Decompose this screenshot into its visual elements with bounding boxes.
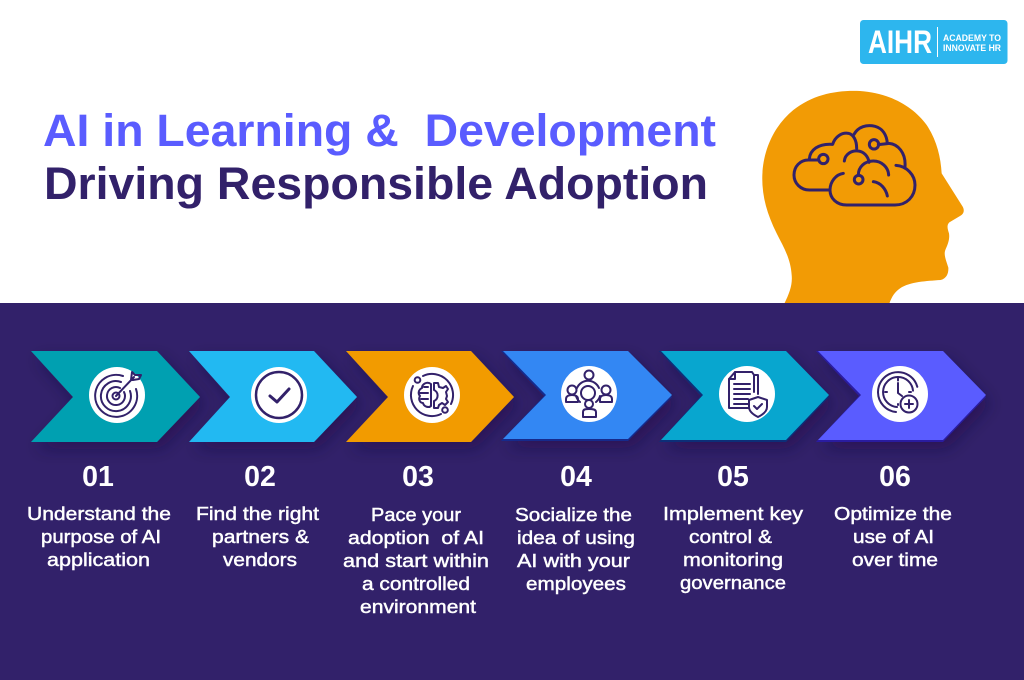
step 04: idea of using bbox=[517, 527, 635, 548]
step 01: purpose of AI bbox=[41, 526, 161, 547]
chevron 5 bbox=[659, 351, 829, 442]
step 01: Understand the bbox=[27, 503, 171, 524]
logo: AIHR: INNOVATE HR bbox=[943, 43, 1001, 54]
chevron 6 bbox=[816, 351, 986, 442]
panel: dark background bbox=[0, 303, 1024, 680]
step 04: employees bbox=[526, 573, 626, 594]
step 04: 04 bbox=[560, 461, 592, 493]
logo: AIHR: ACADEMY TO bbox=[943, 33, 1001, 44]
step 03: environment bbox=[360, 596, 476, 617]
chevron 4 face bbox=[503, 351, 672, 439]
chevron 1 bbox=[31, 351, 200, 442]
chevron 6 face bbox=[818, 351, 986, 440]
step 06: over time bbox=[852, 549, 938, 570]
step 05 bbox=[663, 461, 804, 593]
step 03: a controlled bbox=[362, 573, 470, 594]
step 01: application bbox=[47, 549, 150, 570]
step 04: Socialize the bbox=[515, 504, 632, 525]
step 05: governance bbox=[680, 572, 786, 593]
step 02: 02 bbox=[244, 461, 276, 493]
chevron 5 face bbox=[661, 351, 829, 440]
step 03: Pace your bbox=[371, 504, 461, 525]
step 04 bbox=[515, 461, 635, 594]
title: AI in Learning & Development bbox=[43, 105, 716, 156]
icon: AI brain gear bbox=[404, 367, 460, 423]
step 03: and start within bbox=[343, 550, 489, 571]
logo: AIHR: AIHR bbox=[868, 24, 932, 60]
step 01 bbox=[27, 461, 171, 570]
illustration: head with brain bbox=[762, 91, 964, 304]
icon: team around a table bbox=[561, 366, 617, 422]
step 06: use of AI bbox=[853, 526, 934, 547]
step 02 bbox=[196, 461, 319, 570]
step 05: control & bbox=[689, 526, 773, 547]
icon: target bbox=[89, 367, 145, 423]
chevron 4 bbox=[501, 351, 672, 441]
step 03: adoption of AI bbox=[348, 527, 484, 548]
step 02: vendors bbox=[223, 549, 297, 570]
title: Driving Responsible Adoption bbox=[44, 158, 708, 209]
step 02: Find the right bbox=[196, 503, 319, 524]
icon: check mark bbox=[251, 367, 307, 423]
title bbox=[43, 105, 716, 209]
step 02: partners & bbox=[212, 526, 310, 547]
step 05: 05 bbox=[717, 461, 749, 493]
icon: clock with plus bbox=[872, 366, 928, 422]
chevron 3 bbox=[346, 351, 514, 442]
step 03 bbox=[343, 461, 489, 617]
step 01: 01 bbox=[82, 461, 114, 493]
icon: document with shield bbox=[719, 366, 775, 422]
logo: AIHR bbox=[860, 20, 1008, 64]
step 05: Implement key bbox=[663, 503, 804, 524]
step 04: AI with your bbox=[517, 550, 630, 571]
step 05: monitoring bbox=[683, 549, 783, 570]
step 06 bbox=[834, 461, 952, 570]
step 06: 06 bbox=[879, 461, 911, 493]
step 03: 03 bbox=[402, 461, 434, 493]
chevron 2 bbox=[189, 351, 357, 442]
step 06: Optimize the bbox=[834, 503, 952, 524]
